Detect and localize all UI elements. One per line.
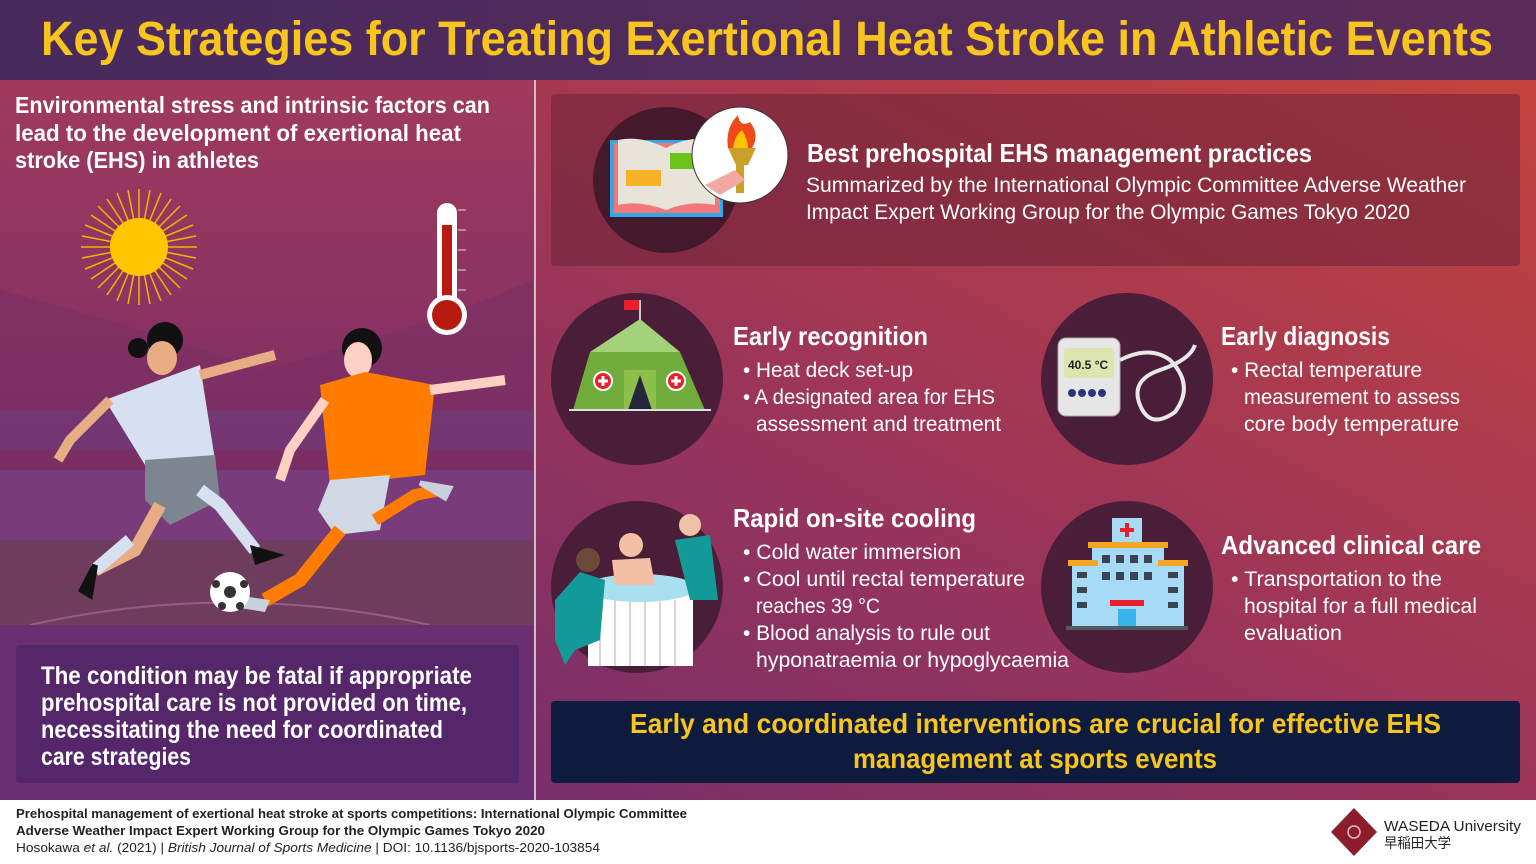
bullets: advanced care: hospital for a full medical <box>1244 595 1477 618</box>
illustration: player in orange <box>235 328 505 612</box>
footer citation: Hosokawa et al. (2021) | British Journal of Sports Medicine | DOI: 10.1136/bjsports-2020-103854 <box>16 840 600 855</box>
panel: left causes <box>0 80 533 800</box>
bullets: early diagnosis <box>1231 359 1460 436</box>
heading: advanced clinical care: Advanced clinical care <box>1221 530 1481 560</box>
bullets: early diagnosis: core body temperature <box>1244 413 1459 436</box>
bullets: early recognition: • Heat deck set-up <box>743 359 913 382</box>
icon: book and torch <box>593 107 788 253</box>
stadium background <box>0 280 533 800</box>
heading: early diagnosis: Early diagnosis <box>1221 321 1390 351</box>
bullets: rapid cooling: • Cold water immersion <box>743 541 961 564</box>
icon: football <box>210 572 250 612</box>
heading: best practices: Best prehospital EHS management practices <box>807 138 1312 168</box>
callout: conclusion <box>551 701 1520 783</box>
intro text: lead to the development of exertional heat <box>15 120 461 146</box>
icon: thermometer <box>427 203 467 335</box>
callout: fatal condition box: prehospital care is not provided on time, <box>41 689 467 717</box>
footer citation: Prehospital management of exertional heat stroke at sports competitions: International Olympic Committee <box>16 806 687 821</box>
callout: fatal condition box: necessitating the need for coordinated <box>41 716 443 744</box>
callout: conclusion: management at sports events <box>853 743 1217 774</box>
heading: rapid cooling: Rapid on-site cooling <box>733 503 976 533</box>
intro text <box>15 92 490 173</box>
icon: cold water immersion <box>551 501 723 673</box>
icon: hospital <box>1041 501 1213 673</box>
panel: advanced clinical care <box>1041 501 1481 673</box>
text: summary <box>806 174 1466 224</box>
callout: fatal condition box <box>16 645 519 783</box>
bullets: early recognition: • A designated area for EHS <box>743 386 995 409</box>
logo: Waseda University: 早稲田大学 <box>1384 835 1451 851</box>
footer citation: Adverse Weather Impact Expert Working Group for the Olympic Games Tokyo 2020 <box>16 823 545 838</box>
intro text: stroke (EHS) in athletes <box>15 147 259 173</box>
bullets: rapid cooling: hyponatraemia or hypoglycaemia <box>756 649 1069 672</box>
bullets: early recognition: assessment and treatment <box>756 413 1001 436</box>
bullets: rapid cooling: reaches 39 °C <box>756 595 880 618</box>
bullets: advanced care <box>1231 568 1477 645</box>
intro text: Environmental stress and intrinsic factors can <box>15 92 490 118</box>
callout: conclusion: Early and coordinated interventions are crucial for effective EHS <box>630 708 1441 739</box>
icon: rectal thermometer: 40.5 °C <box>1068 358 1108 372</box>
logo: Waseda University <box>1331 808 1522 856</box>
text: summary: Summarized by the International Olympic Committee Adverse Weather <box>806 174 1466 197</box>
panel: early diagnosis <box>1041 293 1460 465</box>
heading: early recognition: Early recognition <box>733 321 928 351</box>
icon: medical tent <box>551 293 723 465</box>
bullets: early diagnosis: • Rectal temperature <box>1231 359 1422 382</box>
panel: early recognition <box>551 293 1001 465</box>
bullets: rapid cooling: • Cool until rectal temperature <box>743 568 1025 591</box>
panel: best practices <box>551 94 1520 266</box>
logo: Waseda University: WASEDA University <box>1384 818 1522 835</box>
bullets: rapid cooling <box>743 541 1069 672</box>
callout: fatal condition box: The condition may be fatal if appropriate <box>41 662 472 690</box>
illustration: player in white <box>58 322 285 595</box>
bullets: rapid cooling: • Blood analysis to rule out <box>743 622 990 645</box>
icon: sun <box>81 189 197 305</box>
footer citation <box>0 800 1536 864</box>
header bar <box>0 0 1536 80</box>
text: summary: Impact Expert Working Group for the Olympic Games Tokyo 2020 <box>806 201 1410 224</box>
panel: rapid cooling <box>551 501 1069 673</box>
callout: fatal condition box: care strategies <box>41 743 191 771</box>
bullets: advanced care: evaluation <box>1244 622 1342 645</box>
bullets: early recognition <box>743 359 1001 436</box>
bullets: advanced care: • Transportation to the <box>1231 568 1442 591</box>
icon: rectal thermometer <box>1041 293 1213 465</box>
bullets: early diagnosis: measurement to assess <box>1244 386 1460 409</box>
